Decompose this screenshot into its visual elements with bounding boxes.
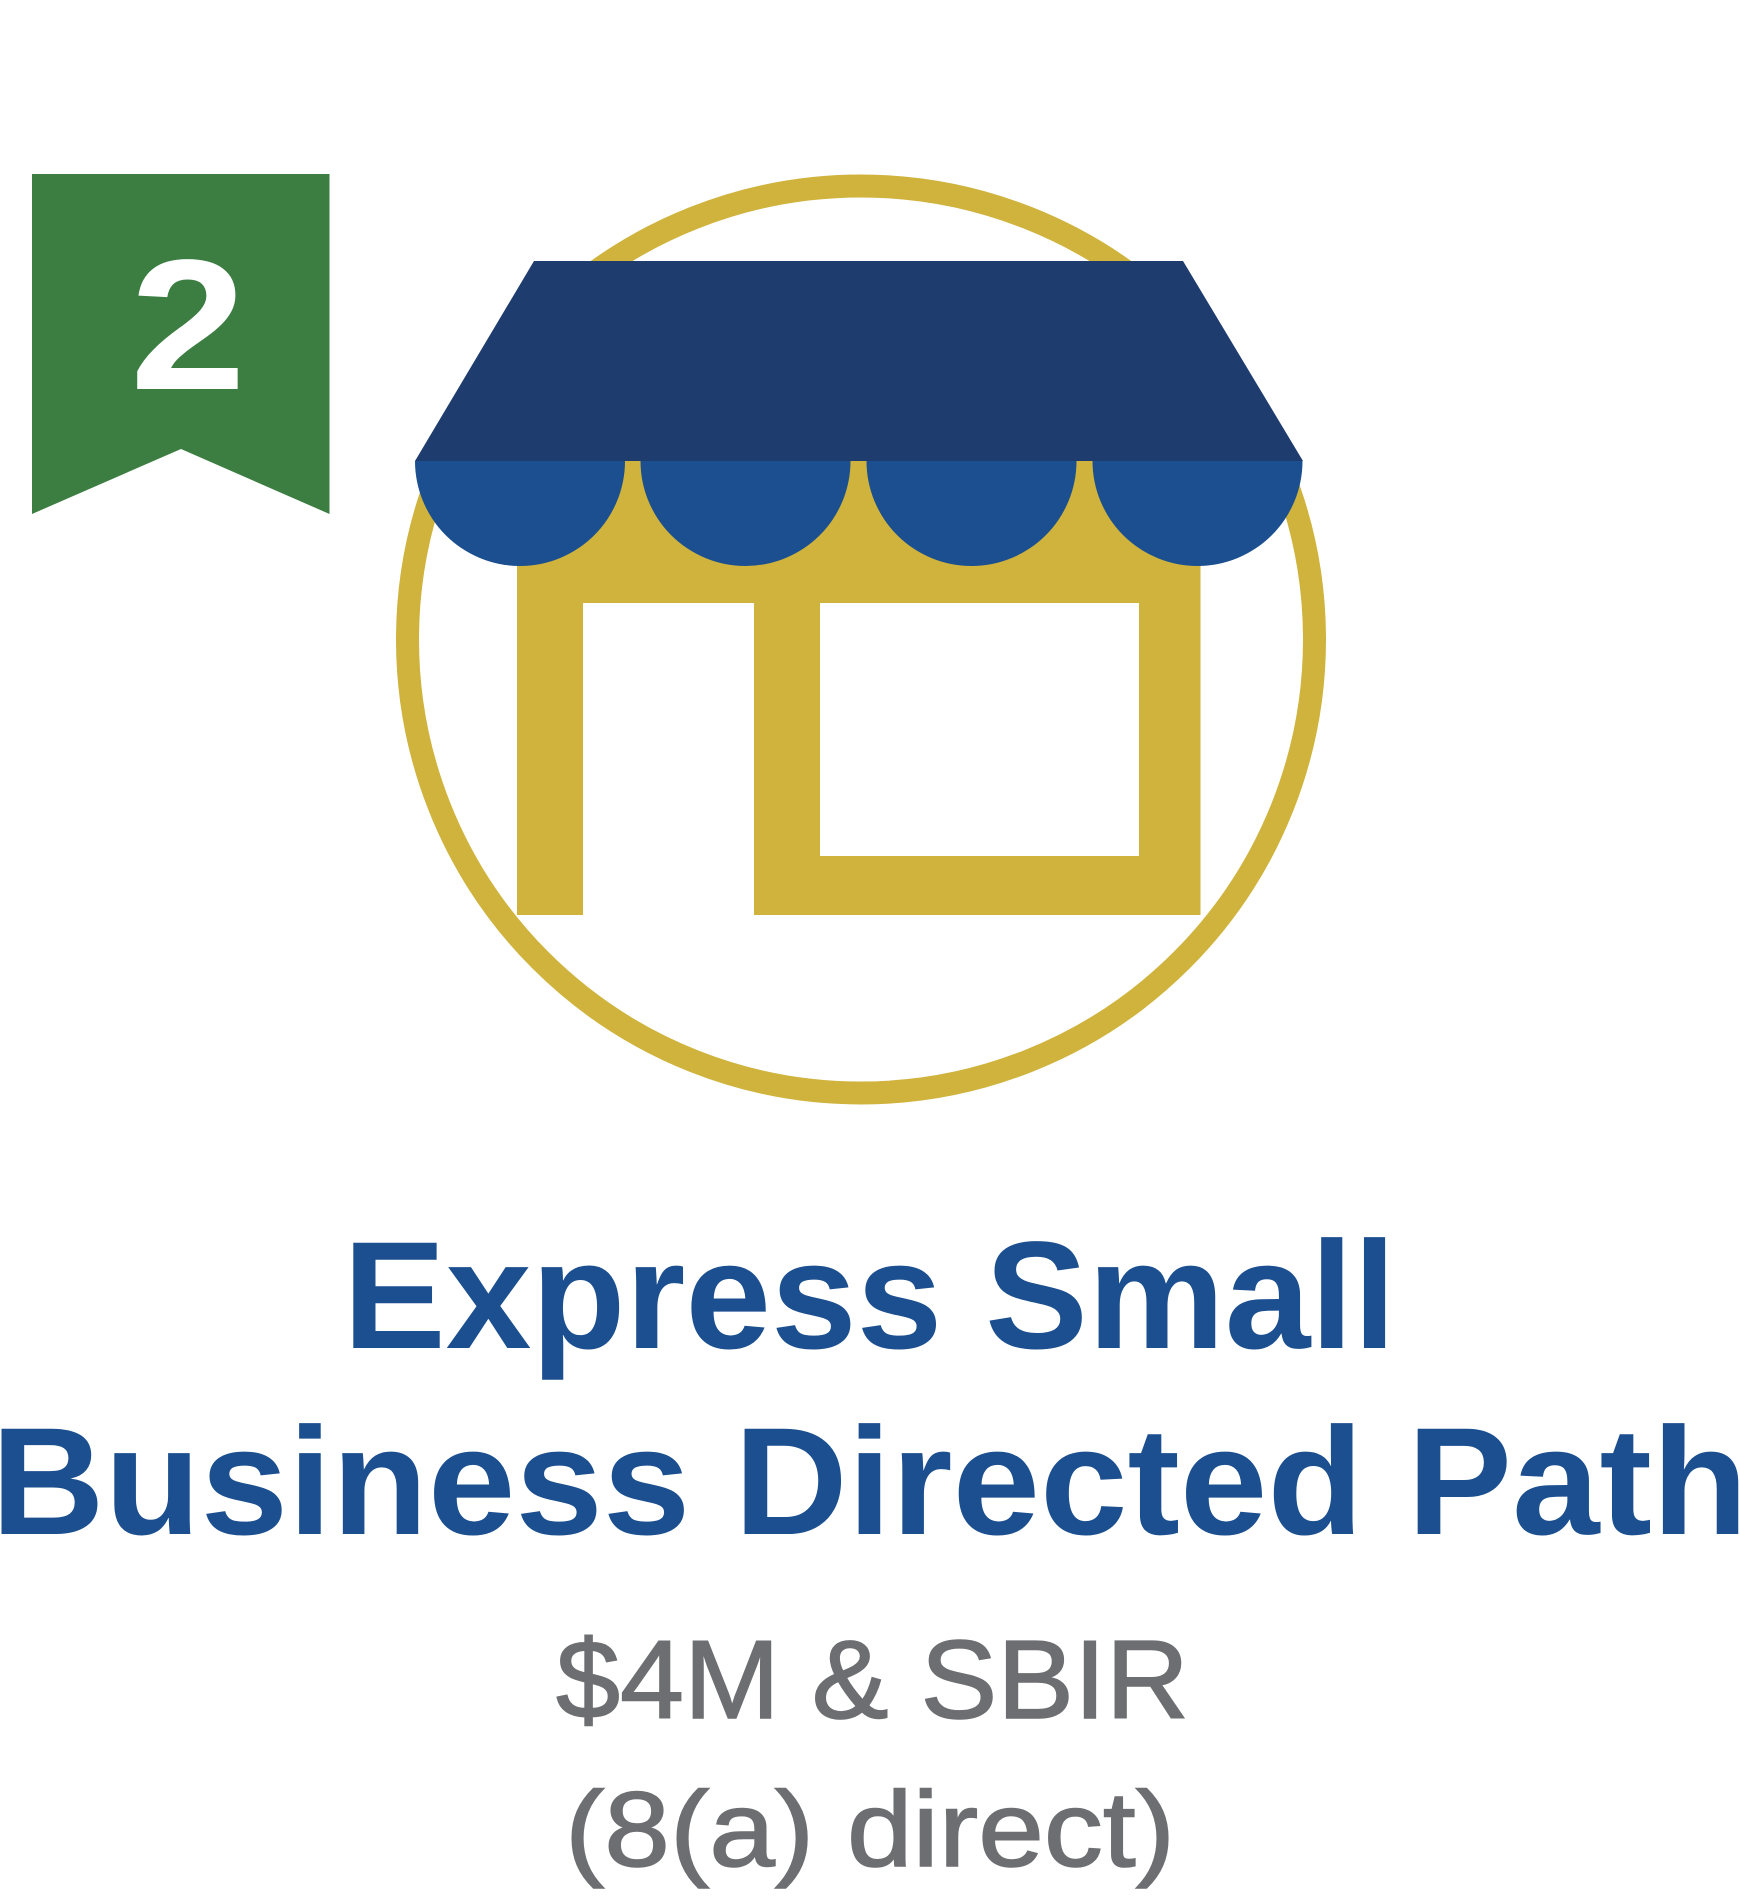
icon: storefront in circle <box>408 186 1314 1093</box>
awning scallops <box>415 461 1302 566</box>
awning roof <box>415 261 1303 461</box>
badge: number 2 ribbon <box>32 174 330 514</box>
storefront building <box>517 461 1200 915</box>
subheading <box>556 1618 1189 1889</box>
badge: number 2 ribbon: 2 <box>130 222 246 429</box>
icon ring <box>408 186 1314 1093</box>
heading: Express Small <box>343 1210 1396 1381</box>
subheading: $4M & SBIR <box>556 1618 1189 1742</box>
heading: Business Directed Path <box>0 1396 1740 1567</box>
subheading: (8(a) direct) <box>565 1769 1175 1889</box>
heading <box>0 1210 1740 1567</box>
